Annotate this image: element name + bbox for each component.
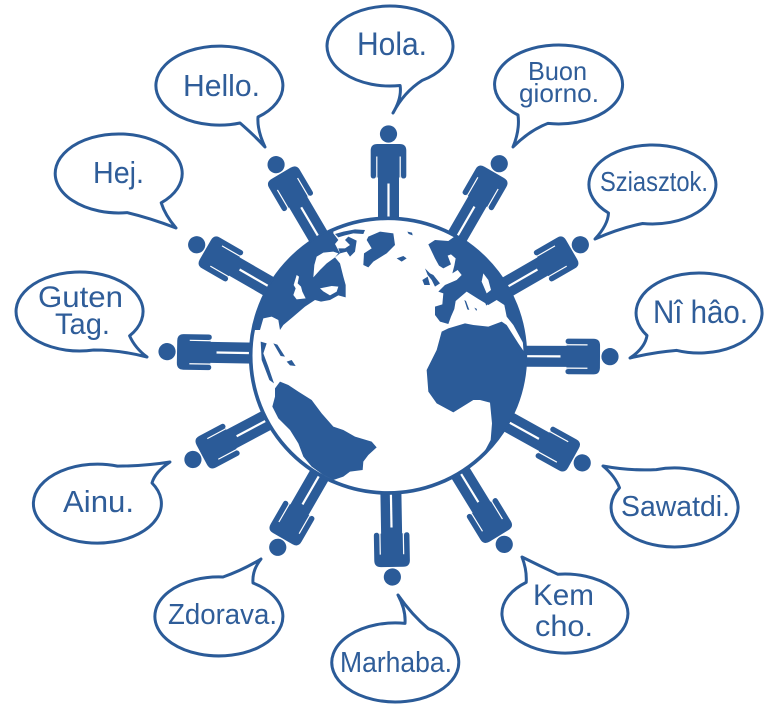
icon: person 240 degrees — [177, 403, 278, 479]
speech bubble: Ni hao — [630, 273, 762, 358]
speech bubble: Guten Tag: Guten — [38, 281, 123, 314]
icon: person 30 degrees — [441, 147, 519, 247]
icon: person 120 degrees — [498, 405, 598, 483]
icon: person 300 degrees — [180, 225, 280, 303]
group: people — [158, 125, 619, 586]
speech bubble: Sawatdi — [603, 466, 738, 547]
speech bubble: Hola: Hola. — [357, 26, 427, 62]
speech bubble: Buon giorno: giorno. — [519, 78, 599, 108]
icon: person 60 degrees — [497, 225, 597, 303]
icon: globe — [248, 216, 528, 495]
icon: person 210 degrees — [258, 464, 336, 564]
icon: person right — [523, 338, 619, 375]
speech bubble: Kem cho: Kem — [533, 579, 594, 612]
speech bubble: Ainu: Ainu. — [63, 484, 134, 519]
speech bubble: Guten Tag: Tag. — [55, 308, 110, 341]
speech bubble: Zdorava: Zdorava. — [168, 599, 277, 631]
icon: person 330 degrees — [256, 148, 335, 248]
speech bubble: Hej — [55, 134, 182, 228]
speech bubble: Zdorava — [155, 559, 283, 656]
speech bubble: Marhaba: Marhaba. — [340, 647, 452, 679]
speech bubble: Buon giorno: Buon — [528, 56, 587, 86]
speech bubble: Marhaba — [332, 595, 459, 702]
speech bubble: Ni hao: Nî hâo. — [653, 294, 748, 330]
icon: person bottom — [373, 490, 410, 586]
speech bubble: Hello — [156, 46, 283, 147]
speech bubble: Sawatdi: Sawatdi. — [621, 491, 730, 523]
speech bubble: Buon giorno — [495, 45, 623, 147]
speech bubble: Kem cho: cho. — [535, 610, 593, 643]
icon: person top — [371, 125, 406, 220]
speech bubble: Sziasztok — [589, 145, 716, 239]
speech bubble: Hello: Hello. — [183, 68, 260, 103]
speech bubble: Hola — [327, 6, 453, 113]
speech bubble: Ainu — [33, 462, 170, 543]
speech bubble: Guten Tag — [16, 272, 147, 357]
speech bubble: Sziasztok: Sziasztok. — [600, 166, 708, 197]
speech bubble: Hej: Hej. — [93, 155, 144, 190]
speech bubble: Kem cho — [502, 557, 628, 653]
icon: person 150 degrees — [444, 461, 524, 561]
icon: person left — [158, 334, 254, 371]
